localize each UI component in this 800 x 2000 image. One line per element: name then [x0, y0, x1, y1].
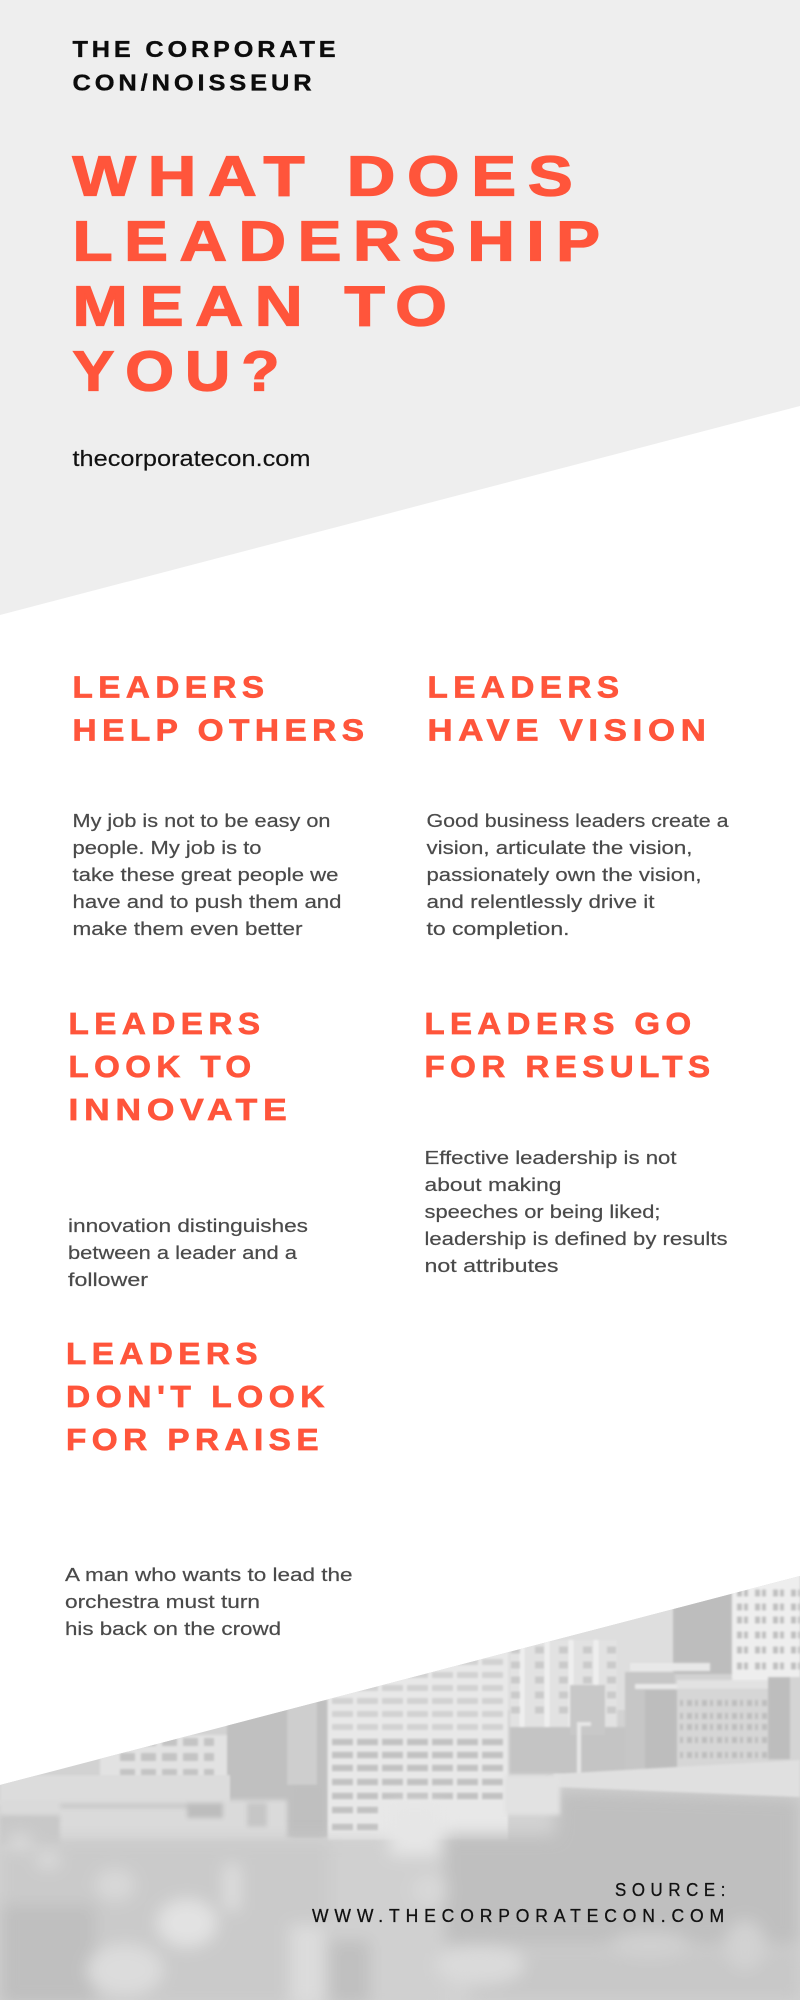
body text: [68, 1215, 308, 1290]
source credit: SOURCE:: [615, 1880, 731, 1900]
body text: [65, 1564, 352, 1639]
panel: leaders go for results: [424, 1007, 728, 1276]
body text: to completion.: [426, 918, 570, 939]
footer cityscape photo: [0, 1570, 800, 2000]
brand name: CON/NOISSEUR: [72, 70, 316, 96]
heading: [424, 1007, 716, 1084]
body text: vision, articulate the vision,: [426, 837, 692, 858]
panel: leaders help others: [72, 670, 370, 939]
middle tower: [328, 1640, 508, 1840]
source credit: WWW.THECORPORATECON.COM: [312, 1906, 730, 1926]
body text: leadership is defined by results: [424, 1228, 728, 1249]
body text: A man who wants to lead the: [65, 1564, 352, 1585]
body text: take these great people we: [72, 864, 338, 885]
heading: HAVE VISION: [428, 714, 712, 748]
body text: between a leader and a: [68, 1242, 298, 1263]
dark block and low building: [227, 1700, 327, 1837]
body text: Good business leaders create a: [426, 810, 729, 831]
distant and tall buildings: [0, 1570, 800, 1840]
body text: [426, 810, 729, 939]
heading: LEADERS GO: [424, 1007, 696, 1041]
heading: LOOK TO: [68, 1050, 256, 1084]
heading: LEADERS: [72, 670, 270, 704]
body text: have and to push them and: [72, 891, 342, 912]
brand name: THE CORPORATE: [72, 36, 340, 62]
heading: INNOVATE: [68, 1093, 292, 1127]
main title: WHAT DOES: [72, 144, 584, 208]
body text: [424, 1147, 728, 1276]
panel: leaders look to innovate: [68, 1007, 308, 1290]
blurred foreground: [2, 1799, 288, 1838]
heading: [428, 670, 712, 748]
website url: thecorporatecon.com: [72, 446, 310, 471]
body text: his back on the crowd: [65, 1618, 281, 1639]
body text: passionately own the vision,: [426, 864, 702, 885]
body text: and relentlessly drive it: [426, 891, 655, 912]
body text: orchestra must turn: [65, 1591, 260, 1612]
body text: speeches or being liked;: [424, 1201, 660, 1222]
source credit: [312, 1880, 731, 1926]
heading: HELP OTHERS: [72, 714, 370, 748]
body text: about making: [424, 1174, 562, 1195]
main title: [72, 144, 612, 404]
main title: MEAN TO: [72, 274, 458, 338]
brand name: [72, 36, 340, 96]
sloped roof band: [553, 1760, 800, 1797]
body text: make them even better: [72, 918, 302, 939]
heading: LEADERS: [68, 1007, 266, 1041]
body text: My job is not to be easy on: [72, 810, 330, 831]
body text: [72, 810, 342, 939]
heading: LEADERS: [428, 670, 624, 704]
heading: [72, 670, 370, 748]
body text: people. My job is to: [72, 837, 262, 858]
header background panel: [0, 0, 800, 615]
panel: leaders have vision: [426, 670, 729, 939]
heading: DON'T LOOK: [66, 1380, 330, 1414]
body text: not attributes: [424, 1255, 558, 1276]
heading: FOR PRAISE: [66, 1423, 324, 1457]
heading: FOR RESULTS: [424, 1050, 716, 1084]
main title: LEADERSHIP: [72, 210, 612, 274]
body text: follower: [68, 1269, 148, 1290]
body text: innovation distinguishes: [68, 1215, 308, 1236]
body text: Effective leadership is not: [424, 1147, 677, 1168]
main title: YOU?: [72, 340, 290, 404]
heading: LEADERS: [66, 1337, 263, 1371]
panel: leaders don't look for praise: [65, 1337, 352, 1639]
heading: [68, 1007, 292, 1127]
heading: [66, 1337, 330, 1457]
